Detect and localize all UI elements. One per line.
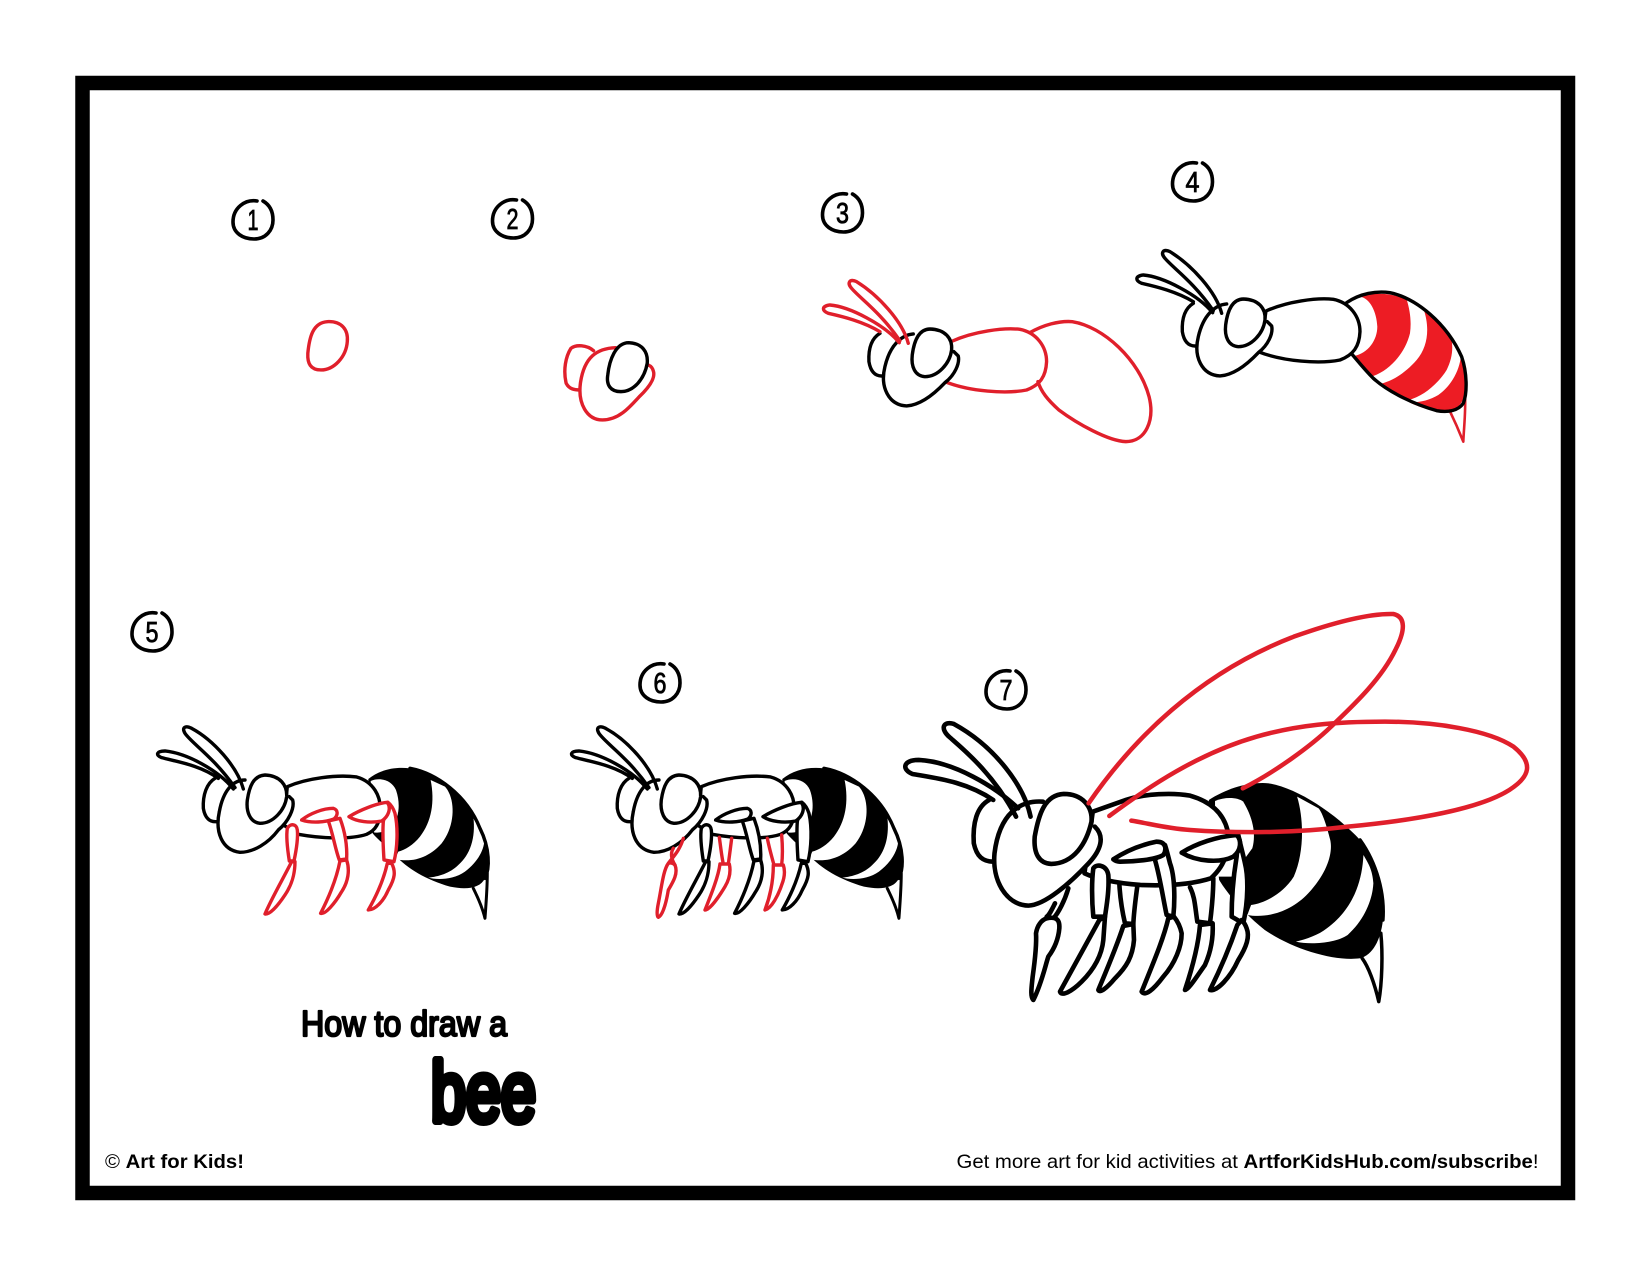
step 3 drawing: antennae, thorax, abdomen bbox=[823, 281, 1151, 442]
step 7 drawing: finished bee with red wings bbox=[905, 614, 1527, 1002]
red wings bbox=[1089, 614, 1527, 832]
thorax and head bbox=[905, 723, 1228, 906]
step 1 number: 1 bbox=[248, 205, 258, 237]
step 1 number bbox=[233, 201, 273, 239]
step 6 number: 6 bbox=[654, 668, 666, 700]
step 5 drawing: black bee with red legs bbox=[158, 727, 488, 918]
footer: subscribe line: Get more art for kid activities at ArtforKidsHub.com/subscribe ! bbox=[956, 1151, 1538, 1173]
step 7 number bbox=[986, 671, 1026, 709]
legs in front of body bbox=[1060, 835, 1248, 994]
title: How to draw a: How to draw a bbox=[301, 1003, 508, 1044]
step 2 number bbox=[492, 200, 532, 238]
red legs bbox=[265, 802, 397, 914]
page frame bbox=[82, 83, 1568, 1193]
footer: copyright: © Art for Kids! bbox=[105, 1151, 244, 1173]
step 4 number bbox=[1172, 163, 1212, 201]
step 7 number: 7 bbox=[1000, 675, 1012, 707]
step 6 drawing: black bee with extra red legs bbox=[572, 727, 902, 918]
step 5 number bbox=[132, 613, 172, 651]
step 6 number bbox=[640, 664, 680, 702]
legs behind body bbox=[1031, 878, 1213, 1000]
step 2 number: 2 bbox=[506, 204, 518, 236]
step 4 drawing: bee with red stripes bbox=[1137, 251, 1466, 442]
title: bee: bee bbox=[431, 1045, 536, 1139]
step 3 number: 3 bbox=[836, 198, 849, 230]
step 3 number bbox=[822, 194, 862, 232]
step 1 drawing: eye oval bbox=[308, 322, 347, 370]
step 2 drawing: head bbox=[565, 343, 654, 420]
step 4 number: 4 bbox=[1186, 167, 1200, 199]
step 5 number: 5 bbox=[146, 617, 158, 649]
